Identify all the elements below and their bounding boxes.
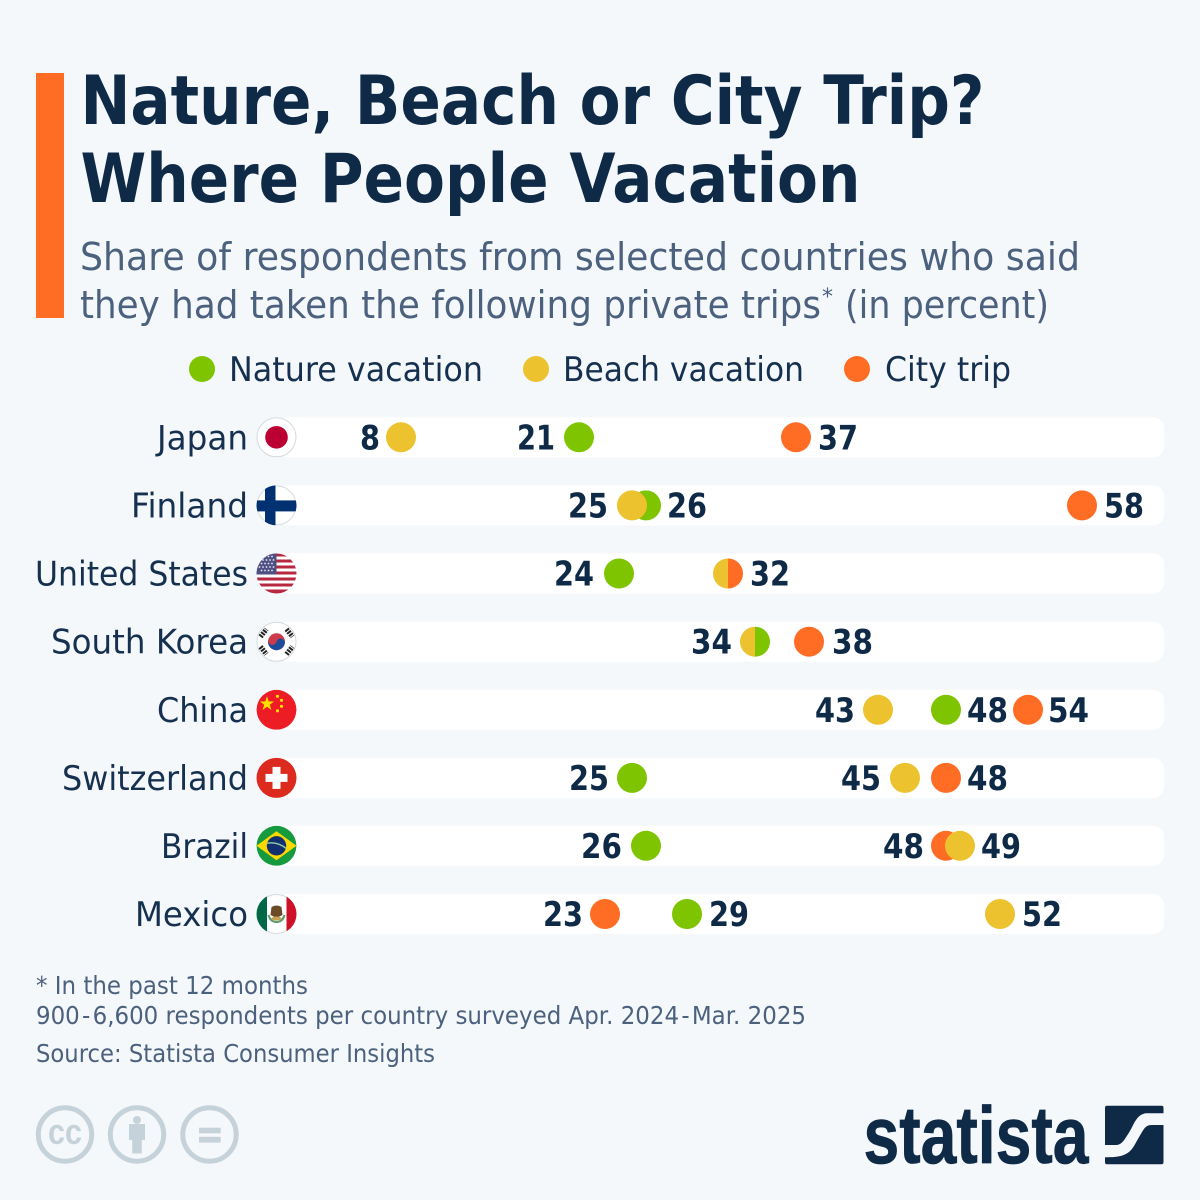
row: South Korea: 34: [691, 623, 732, 663]
footnote: * In the past 12 months: [36, 971, 308, 1000]
row: United States: 24: [554, 554, 594, 594]
row: China: China: [157, 691, 248, 731]
row: Mexico: Mexico: [135, 895, 248, 935]
subtitle: Share of respondents from selected countries who said: [80, 235, 1080, 279]
row: China: 54: [1048, 691, 1089, 731]
row: Japan: Japan: [155, 418, 248, 458]
row: Finland: Finland: [131, 486, 248, 526]
flag: Finland: [256, 485, 296, 525]
accent bar: [36, 73, 64, 318]
row: Mexico: 52: [1022, 895, 1062, 935]
row: Mexico: 23: [543, 895, 583, 935]
subtitle: [80, 235, 1080, 327]
footnote: 900 - 6,600 respondents per country surveyed Apr. 2024 - Mar. 2025: [36, 1001, 806, 1030]
row: Finland: [131, 485, 1164, 526]
row: Switzerland: 25: [569, 759, 609, 799]
title: Where People Vacation: [80, 140, 860, 219]
row: South Korea: 38: [832, 623, 873, 663]
subtitle: *: [822, 285, 833, 310]
row: Brazil: 48: [883, 827, 924, 867]
row: Brazil: 49: [981, 827, 1021, 867]
half marker: beach and nature: [740, 627, 770, 657]
flag: Switzerland: [256, 758, 296, 798]
title: [80, 62, 984, 219]
subtitle: (in percent): [845, 283, 1049, 327]
source: Source: Statista Consumer Insights: [36, 1039, 435, 1068]
row: Brazil: Brazil: [161, 827, 248, 867]
footnote: [36, 971, 806, 1030]
icon: attribution: [110, 1108, 164, 1161]
title: Nature, Beach or City Trip?: [80, 62, 984, 141]
row: Brazil: [161, 826, 1164, 867]
flag: Brazil: [256, 826, 296, 866]
row: Japan: 37: [818, 418, 858, 458]
flag: Japan: [257, 418, 296, 457]
icon: statista mark: [1105, 1106, 1164, 1164]
row: Japan: 8: [360, 418, 380, 458]
icon: creative commons: [38, 1108, 92, 1161]
flag: China: [256, 690, 296, 730]
flag: South Korea: [257, 622, 296, 661]
row: Switzerland: Switzerland: [62, 759, 248, 799]
icon: creative commons: cc: [48, 1111, 82, 1152]
legend: [189, 350, 1011, 390]
legend item: city trip: City trip: [885, 350, 1011, 390]
legend item: beach vacation: Beach vacation: [563, 350, 804, 390]
row: Switzerland: 48: [967, 759, 1008, 799]
legend item: nature vacation: Nature vacation: [229, 350, 483, 390]
row: South Korea: [51, 622, 1164, 663]
row: China: 43: [815, 691, 855, 731]
row: Brazil: 26: [581, 827, 622, 867]
row: Finland: 26: [667, 486, 707, 526]
row: Japan: [155, 417, 1164, 458]
row: Finland: 25: [568, 486, 608, 526]
row: United States: [35, 554, 1164, 594]
row: China: [157, 690, 1164, 731]
row: South Korea: South Korea: [51, 623, 248, 663]
row: China: 48: [967, 691, 1008, 731]
row: Mexico: [135, 894, 1164, 935]
row: Finland: 58: [1104, 486, 1144, 526]
statista logo: statista: [864, 1091, 1089, 1181]
row: Switzerland: [62, 758, 1164, 799]
row: Switzerland: 45: [841, 759, 881, 799]
flag: Mexico: [256, 894, 296, 934]
icon: no derivatives: [183, 1108, 236, 1161]
row: Mexico: 29: [709, 895, 749, 935]
row: United States: United States: [35, 554, 248, 594]
half marker: beach and city: [713, 558, 743, 588]
subtitle: they had taken the following private trips: [80, 283, 821, 327]
flag: United States: [256, 554, 296, 594]
row: Japan: 21: [517, 418, 555, 458]
row: United States: 32: [750, 554, 790, 594]
